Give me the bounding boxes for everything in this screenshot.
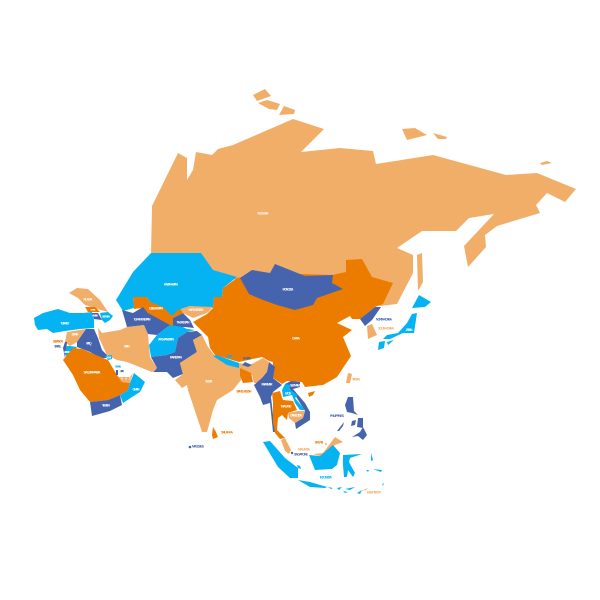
country: Qatar and Bahrain: QATAR [120, 370, 124, 373]
country: Malaysia [281, 437, 343, 456]
country: China [193, 259, 393, 397]
country: Qatar and Bahrain [115, 366, 124, 375]
country: Turkey [34, 309, 94, 333]
country: Kazakhstan [116, 253, 237, 316]
country: United Arab Emirates: UAE [121, 376, 131, 380]
country: Iran [94, 320, 157, 372]
country: Tajikistan [173, 313, 194, 328]
country: North Korea: NORTH KOREA [376, 318, 393, 322]
country: East Timor: EAST TIMOR [367, 490, 382, 494]
country: Thailand [272, 391, 297, 439]
country: Afghanistan [149, 325, 195, 357]
country: Russia Caucasus [69, 288, 108, 312]
country: Kyrgyzstan [181, 306, 213, 318]
country: Kuwait [105, 355, 112, 360]
country: Oman: OMAN [132, 388, 140, 392]
country: Kyrgyzstan: KYRGYZSTAN [188, 308, 204, 312]
country: Iran: IRAN [124, 344, 130, 348]
country: Turkey: TURKEY [60, 322, 70, 326]
label: Lebanon: LEBANON [53, 340, 64, 344]
country: Bhutan: BHUTAN [243, 356, 252, 360]
country: Nepal: NEPAL [226, 354, 234, 358]
country: Cambodia: CAMBODIA [290, 414, 303, 418]
country: South Korea: SOUTH KOREA [378, 326, 395, 330]
country: Bangladesh [236, 368, 253, 394]
country: Myanmar [254, 362, 282, 432]
country: Japan [378, 295, 431, 350]
country: Maldives: MALDIVES [192, 444, 205, 448]
country: East Timor [361, 488, 382, 494]
country: Iraq [77, 329, 107, 358]
country: Mongolia: MONGOLIA [282, 288, 294, 292]
country: Tajikistan: TAJIKISTAN [176, 320, 190, 324]
country: Jordan: JORDAN [64, 350, 70, 354]
country: Taiwan [346, 373, 361, 383]
country: Jordan [64, 346, 77, 358]
country: Vietnam [285, 381, 310, 429]
country: United Arab Emirates [118, 373, 133, 383]
country: Pakistan: PAKISTAN [170, 356, 183, 360]
country: Sri Lanka [212, 427, 234, 439]
country: Singapore: SINGAPORE [294, 452, 309, 456]
country: Pakistan [151, 331, 202, 378]
country: Bangladesh: BANGLADESH [236, 390, 252, 394]
country: Saudi Arabia [63, 348, 130, 402]
country: Philippines: PHILIPPINES [330, 414, 345, 418]
country: Bhutan [242, 356, 252, 367]
country: Nepal [213, 354, 239, 368]
country: China: CHINA [292, 336, 301, 340]
country: Georgia: GEORGIA [90, 308, 96, 312]
country: South Korea [367, 324, 395, 339]
country: Georgia [85, 307, 100, 312]
country: Oman [120, 373, 145, 403]
country: Armenia: ARMENIA [92, 314, 98, 318]
country: Qatar and Bahrain: BAHRAIN [115, 366, 121, 368]
country: Kazakhstan: KAZAKHSTAN [164, 282, 179, 286]
country: Vietnam: VIETNAM [290, 384, 300, 388]
country: Israel: ISRAEL [54, 344, 62, 348]
country: Thailand: THAILAND [280, 404, 292, 408]
country: India: INDIA [206, 380, 213, 384]
country: Uzbekistan: UZBEKISTAN [149, 306, 164, 310]
country: Kuwait: KUWAIT [106, 356, 112, 360]
country: Laos: LAOS [285, 392, 292, 396]
country: Japan: JAPAN [406, 328, 413, 332]
country: Myanmar: MYANMAR [262, 382, 273, 386]
country: Mongolia [240, 264, 343, 310]
country: Saudi Arabia: SAUDI ARABIA [84, 370, 101, 374]
country: Azerbaijan [100, 312, 113, 323]
country: Azerbaijan: AZERBAIJAN [102, 316, 110, 318]
country: Russia: RUSSIA [258, 212, 269, 216]
country: Indonesia [263, 441, 384, 494]
country: Indonesia: INDONESIA [320, 476, 333, 480]
country: Syria: SYRIA [72, 332, 79, 336]
country: Turkmenistan [122, 307, 170, 335]
country: Philippines [330, 397, 367, 440]
country: Yemen [90, 395, 122, 416]
country: Turkmenistan: TURKMENISTAN [134, 318, 151, 322]
country: Yemen: YEMEN [102, 404, 111, 408]
country: Israel [54, 342, 67, 358]
country: Laos [282, 384, 305, 410]
country: Syria [65, 329, 86, 346]
country: Cambodia [288, 411, 305, 423]
country: Iraq: IRAQ [86, 342, 92, 346]
country: Russia Caucasus: RUSSIA [84, 298, 93, 302]
country: India [175, 335, 269, 432]
country: North Korea [360, 307, 393, 326]
country: Brunei: BRUNEI [315, 440, 324, 444]
country: Malaysia: MALAYSIA [298, 448, 311, 452]
country: Sri Lanka: SRI LANKA [221, 430, 234, 434]
country: Russia [151, 89, 576, 306]
country: Afghanistan: AFGHANISTAN [158, 338, 175, 342]
country: Uzbekistan [133, 297, 183, 327]
country: Taiwan: TAIWAN [352, 378, 361, 382]
country: Armenia [92, 313, 102, 320]
country: Brunei [315, 440, 327, 445]
country: Singapore [291, 452, 309, 456]
